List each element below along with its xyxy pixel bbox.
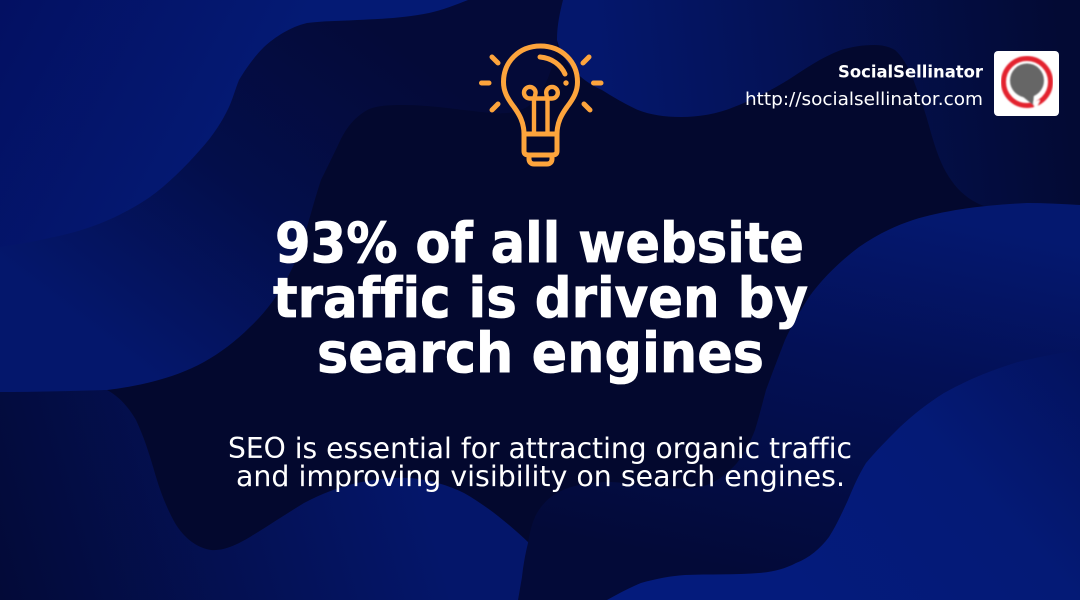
background blob: lower right	[607, 350, 1080, 600]
subtitle line 2: and improving visibility on search engines.	[236, 460, 845, 493]
subtitle line 1: SEO is essential for attracting organic traffic	[228, 432, 852, 465]
background blob: lower left	[0, 390, 529, 600]
bulb filament	[524, 87, 558, 134]
rays	[482, 57, 601, 110]
title line 1: 93% of all website	[275, 211, 804, 275]
bulb base	[524, 134, 557, 164]
title line 2: traffic is driven by	[273, 266, 808, 330]
background blob: upper left outer	[0, 0, 563, 393]
glass highlight dot	[563, 80, 569, 86]
logo	[994, 51, 1059, 116]
background blob: top right	[557, 0, 1080, 207]
glass highlight	[540, 57, 565, 74]
bulb outline	[504, 46, 578, 134]
title line 3: search engines	[317, 321, 764, 385]
background blob: upper left inner	[0, 0, 468, 247]
icon: light bulb	[482, 46, 601, 164]
brand url: http://socialsellinator.com	[745, 89, 983, 110]
background blob: right	[518, 203, 1080, 600]
subtitle	[228, 432, 852, 493]
brand name: SocialSellinator	[838, 62, 984, 82]
title	[273, 211, 808, 385]
